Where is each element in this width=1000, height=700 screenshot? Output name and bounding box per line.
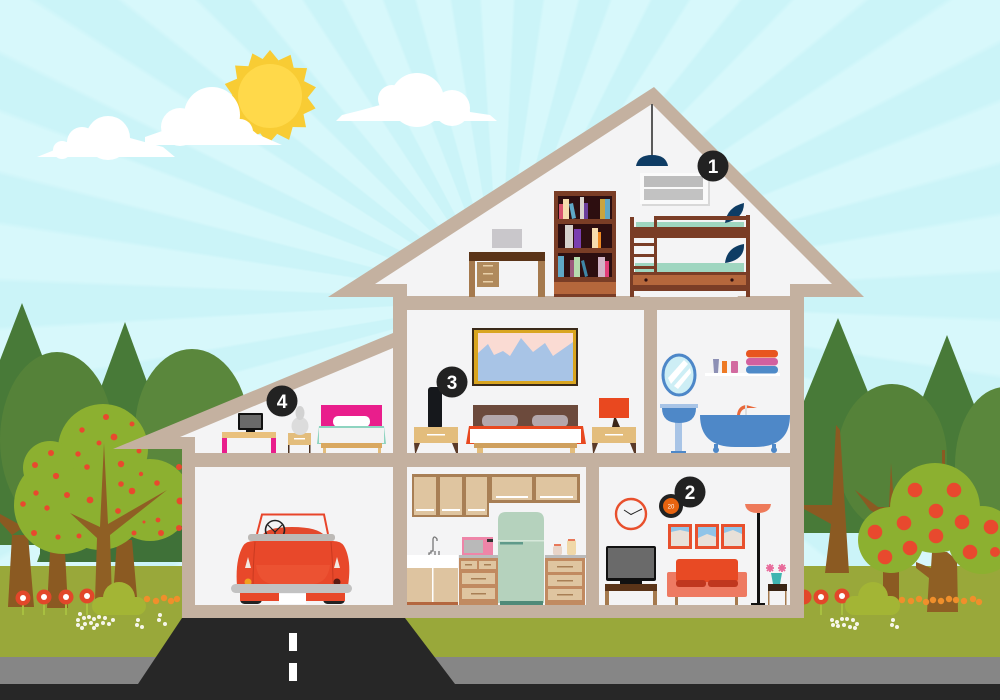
apples left <box>20 414 184 540</box>
smart thermostat <box>659 494 683 518</box>
desk <box>469 252 545 297</box>
icon: sun <box>222 50 318 144</box>
left forest background <box>0 303 249 562</box>
smart thermostat: 20 <box>668 504 675 510</box>
apple tree left foliage <box>14 404 191 554</box>
room: garage <box>195 467 393 605</box>
white flowers right <box>830 617 899 630</box>
red flowers right <box>796 588 850 615</box>
cloud middle <box>145 87 282 146</box>
red flowers left <box>16 588 94 615</box>
flowers on side table <box>766 564 787 605</box>
background tree trunks right <box>804 425 945 601</box>
kitchen drawers left <box>459 555 498 605</box>
pedestal sink <box>660 404 698 453</box>
bathtub <box>700 405 790 453</box>
smart speaker <box>428 387 442 429</box>
road <box>0 657 1000 700</box>
badge 1: 1 <box>708 157 719 178</box>
kitchen drawers right <box>545 555 586 605</box>
badge 1 <box>698 150 728 182</box>
jars <box>553 539 576 555</box>
badge 4: 4 <box>277 392 288 413</box>
room: small bedroom <box>180 348 393 453</box>
apple tree right trunk <box>916 552 958 612</box>
room: bathroom <box>657 310 790 453</box>
room: attic <box>375 104 832 296</box>
right nightstand with lamp <box>592 398 636 453</box>
television on stand <box>605 546 657 605</box>
bush left <box>92 582 146 615</box>
upper kitchen cabinets <box>412 474 580 517</box>
cloud left <box>37 116 175 160</box>
bookshelf <box>554 191 616 297</box>
wall clock <box>616 499 646 529</box>
red convertible car <box>231 514 352 604</box>
floor lamp <box>745 504 771 605</box>
right forest background <box>750 318 1000 543</box>
painting <box>472 328 578 386</box>
badge 2 <box>674 476 706 508</box>
room: master bedroom <box>407 310 644 453</box>
apple tree left trunk <box>70 443 167 600</box>
white flowers left <box>76 612 167 630</box>
sofa <box>667 559 747 605</box>
room: kitchen <box>407 467 586 605</box>
bathroom mirror <box>663 355 695 395</box>
apples right <box>868 483 1000 564</box>
shelf with toiletries and towels <box>705 350 780 376</box>
badge 2: 2 <box>685 483 695 504</box>
microwave <box>462 537 493 555</box>
badge 3: 3 <box>447 373 457 394</box>
badge 3 <box>436 366 468 398</box>
orange flowers left <box>144 595 180 604</box>
badge 4 <box>266 386 298 416</box>
room: living room <box>599 467 790 605</box>
orange flowers right <box>899 596 982 605</box>
ground: grass <box>0 566 1000 658</box>
bush right <box>845 582 900 615</box>
icon: pendant lamp <box>636 104 668 166</box>
sink and lower cabinet <box>407 537 458 605</box>
small desk with monitor <box>222 413 276 453</box>
small bed <box>317 405 386 453</box>
framed pictures <box>668 524 745 549</box>
left nightstand <box>414 427 458 453</box>
vase on nightstand <box>288 406 311 453</box>
background tree trunks left <box>0 514 137 608</box>
laptop on desk <box>492 229 522 248</box>
house shell <box>113 87 864 618</box>
bunk bed <box>630 203 750 297</box>
driveway with dashes <box>138 618 455 684</box>
apple tree right foliage <box>858 463 1000 574</box>
fridge <box>498 512 544 605</box>
bed <box>466 405 586 453</box>
cloud right <box>336 73 497 127</box>
smart air conditioner <box>640 173 710 206</box>
